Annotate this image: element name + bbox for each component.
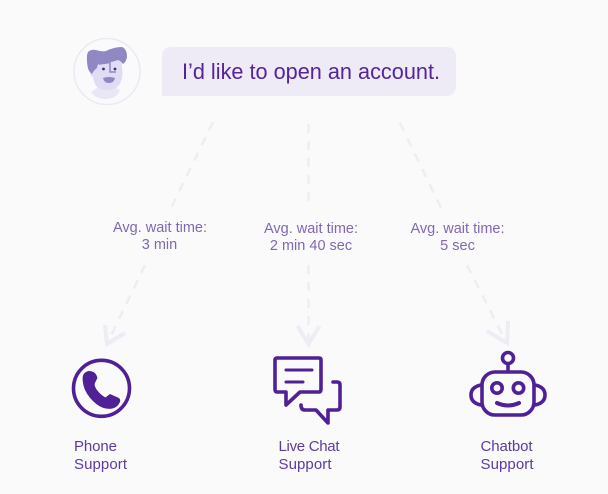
- arrow: to chatbot support: [400, 123, 508, 343]
- arrow: to live chat support: [298, 124, 320, 344]
- label: live chat support: Support: [278, 456, 332, 473]
- label: live chat support: Live Chat: [278, 438, 340, 455]
- label: live chat support: [278, 438, 340, 473]
- wait time: chatbot: 5 sec: [440, 238, 475, 254]
- icon: chatbot: [471, 352, 545, 415]
- wait time: chatbot: Avg. wait time:: [410, 221, 505, 237]
- label: chatbot support: Chatbot: [480, 438, 533, 455]
- icon: live chat: [275, 358, 340, 423]
- wait time: live chat: [264, 221, 358, 254]
- label: chatbot support: [480, 438, 534, 473]
- wait time: live chat: 2 min 40 sec: [270, 238, 352, 254]
- wait time: phone: Avg. wait time:: [113, 220, 207, 236]
- wait time: phone: 3 min: [142, 237, 177, 253]
- label: chatbot support: Support: [480, 456, 534, 473]
- icon: phone: [74, 360, 130, 416]
- label: phone support: Support: [74, 456, 128, 473]
- wait time: live chat: Avg. wait time:: [264, 221, 358, 237]
- wait time: chatbot: [410, 221, 505, 254]
- icon: customer avatar: [74, 38, 140, 104]
- label: phone support: [74, 438, 128, 473]
- speech bubble: [162, 47, 456, 96]
- wait time: phone: [113, 220, 207, 253]
- label: phone support: Phone: [74, 438, 117, 455]
- bubble text: I’d like to open an account.: [182, 59, 440, 84]
- arrow: to phone support: [105, 122, 213, 344]
